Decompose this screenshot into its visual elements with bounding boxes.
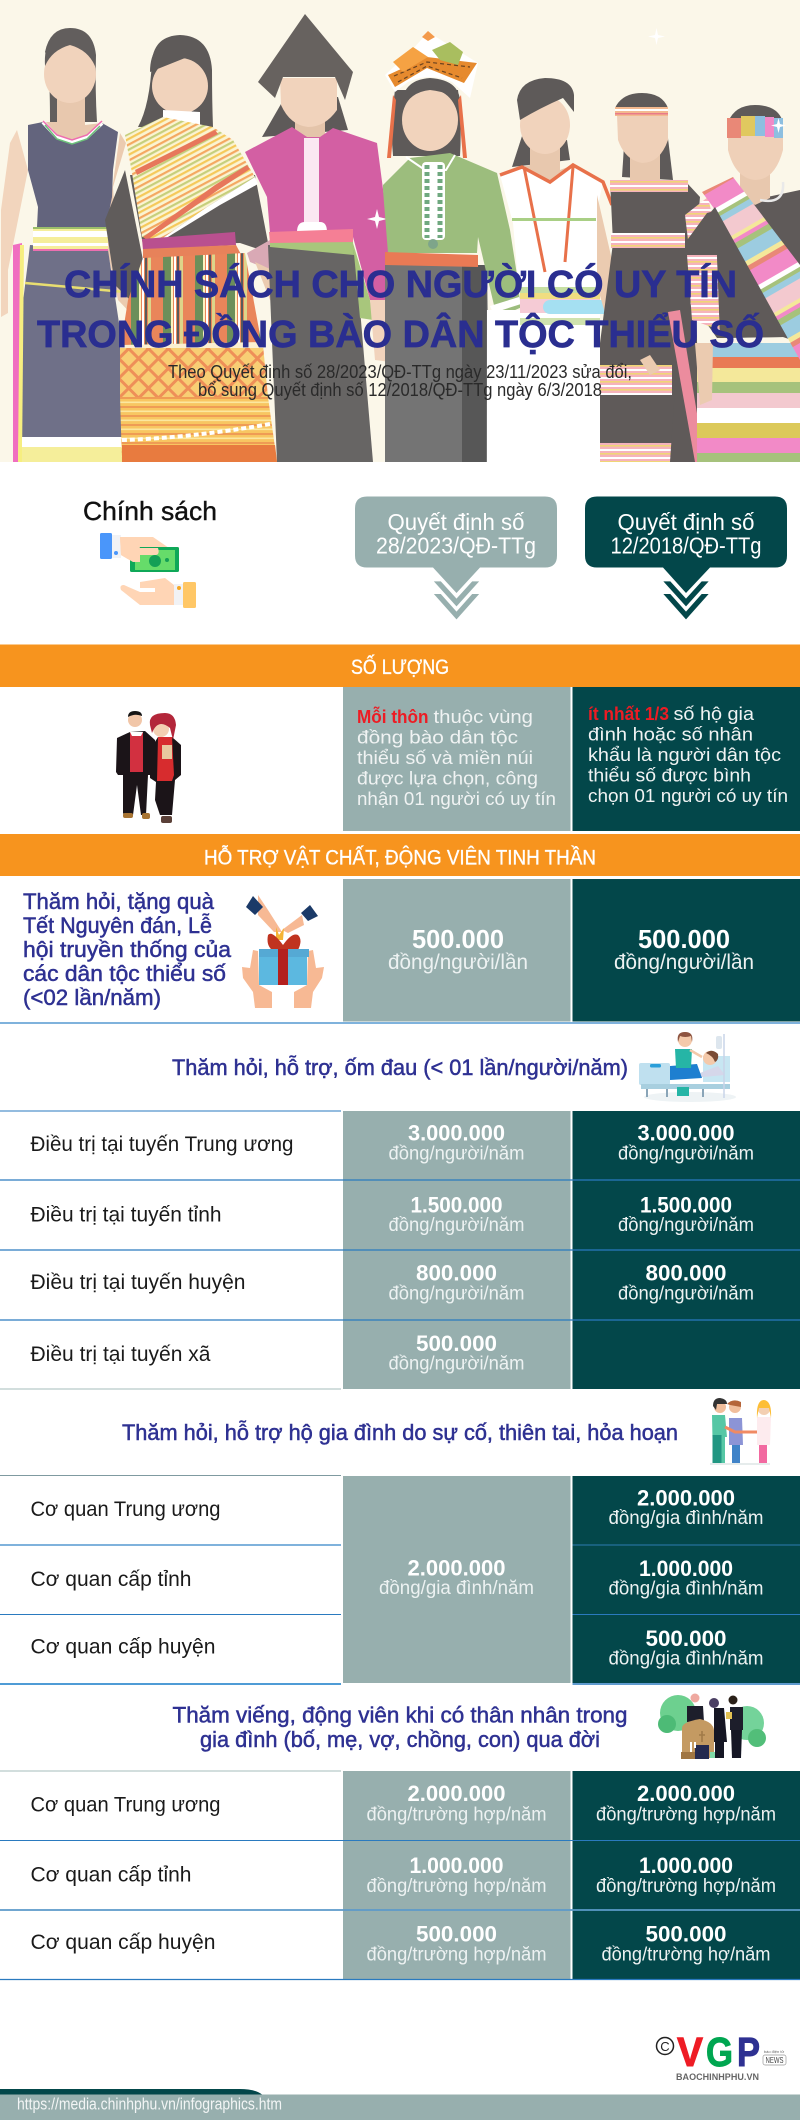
- values 12/2018: đồng/người/năm: [618, 1215, 754, 1236]
- logo: VGP news: báo điện tử: [764, 2049, 784, 2054]
- footer bar: https://media.chinhphu.vn/infographics.htm: [17, 2094, 282, 2114]
- section band: ho tro vat chat: HỖ TRỢ VẬT CHẤT, ĐỘNG VIÊN TINH THẦN: [204, 844, 596, 870]
- cell: so luong 12/2018: ít nhất 1/3: [588, 703, 669, 724]
- cell: tet visit 28/2023: 500.000: [412, 924, 504, 954]
- text: tet visit: Tết Nguyên đán, Lễ: [23, 913, 212, 938]
- merged value 28/2023: đồng/gia đình/năm: [379, 1578, 534, 1599]
- values 12/2018: đồng/trường hợp/năm: [596, 1876, 776, 1897]
- cell: tet visit 28/2023: đồng/người/lần: [388, 951, 528, 974]
- text: tet visit: [23, 889, 232, 1010]
- logo: VGP news: BAOCHINHPHU.VN: [676, 2072, 759, 2082]
- cell: so luong 28/2023: thiểu số và miền núi: [357, 747, 533, 768]
- title line 1: CHÍNH SÁCH CHO NGƯỜI CÓ UY TÍN: [64, 262, 737, 306]
- row label 2: Điều trị tại tuyến tỉnh: [30, 1204, 222, 1226]
- section band: so luong: SỐ LƯỢNG: [351, 653, 449, 679]
- values 28/2023: đồng/người/năm: [388, 1354, 524, 1374]
- row label 3: Điều trị tại tuyến huyện: [30, 1271, 246, 1294]
- table: bereavement rates: [0, 1771, 800, 1980]
- text: tet visit: các dân tộc thiểu số: [23, 961, 226, 986]
- values 28/2023: đồng/trường hợp/năm: [366, 1944, 546, 1966]
- cell: tet visit 12/2018: 500.000: [638, 924, 730, 954]
- values 12/2018: 2.000.000: [637, 1486, 735, 1510]
- logo: VGP news: [656, 2029, 786, 2082]
- callout: decision 28/2023: Quyết định số: [388, 509, 525, 535]
- figure 5: white dress with orange trim: [487, 78, 645, 462]
- values 28/2023: đồng/trường hợp/năm: [366, 1804, 546, 1826]
- values 12/2018: [596, 1781, 776, 1966]
- hero banner: seven women in ethnic costumes: [0, 0, 800, 462]
- logo: VGP news: C: [660, 2039, 670, 2054]
- cell: so luong 12/2018: khẩu là người dân tộc: [588, 744, 781, 765]
- cell: so luong 28/2023: nhận 01 người có uy tín: [357, 788, 556, 809]
- row label: province: Cơ quan cấp tỉnh: [30, 1864, 192, 1886]
- values 12/2018: 3.000.000: [638, 1121, 734, 1146]
- heading: bereavement support: [172, 1702, 628, 1752]
- icon: gift in hands: [242, 895, 324, 1008]
- logo: VGP news: NEWS: [766, 2056, 784, 2065]
- cell: tet visit 12/2018: [572, 879, 800, 1022]
- cell: so luong 12/2018: số hộ gia: [674, 703, 755, 724]
- values 28/2023: 500.000: [416, 1922, 497, 1946]
- icon: family at a grave: [658, 1694, 766, 1759]
- callout: decision 12/2018: 12/2018/QĐ-TTg: [610, 532, 762, 558]
- cell: so luong 28/2023: đồng bào dân tộc: [357, 726, 518, 748]
- values 12/2018: 800.000: [646, 1261, 726, 1286]
- figure 6: dark dress with headband: [600, 93, 712, 462]
- title line 2: TRONG ĐỒNG BÀO DÂN TỘC THIỂU SỐ: [37, 311, 764, 356]
- row label 4: Điều trị tại tuyến xã: [30, 1343, 211, 1366]
- values 28/2023: [388, 1121, 524, 1374]
- callout: decision 12/2018: [585, 496, 787, 620]
- values 28/2023: đồng/người/năm: [388, 1215, 524, 1236]
- values 12/2018: đồng/gia đình/năm: [608, 1648, 764, 1670]
- row label 1: Điều trị tại tuyến Trung ương: [30, 1133, 294, 1156]
- values 12/2018: đồng/người/năm: [618, 1284, 754, 1305]
- figure 2: striped shawl: [105, 35, 285, 462]
- row label: district: Cơ quan cấp huyện: [30, 1636, 216, 1658]
- icon: nurse and patient: [639, 1032, 736, 1102]
- values 12/2018: [608, 1486, 764, 1670]
- values 12/2018: đồng/gia đình/năm: [608, 1578, 764, 1600]
- figure 3: pink blouse and conical hat: [245, 14, 392, 462]
- icon: hands passing money: [100, 533, 196, 608]
- cell: so luong 28/2023: thuộc vùng: [434, 706, 533, 727]
- section band: so luong: [0, 644, 800, 687]
- values 28/2023: 1.500.000: [410, 1193, 502, 1218]
- row label: province: Cơ quan cấp tỉnh: [30, 1568, 192, 1591]
- values 12/2018: 1.000.000: [639, 1556, 733, 1581]
- table: sickness rates: [0, 1111, 800, 1389]
- cell: so luong 28/2023: Mỗi thôn: [357, 706, 428, 727]
- icon: three friends helping: [710, 1398, 771, 1465]
- heading: bereavement support: Thăm viếng, động viên khi có thân nhân trong: [172, 1702, 628, 1728]
- subtitle: Theo Quyết định số 28/2023/QĐ-TTg ngày 23/11/2023 sửa đổi,: [168, 362, 632, 382]
- cell: so luong 12/2018: chọn 01 người có uy tín: [588, 785, 788, 806]
- values 28/2023: [366, 1781, 546, 1966]
- values 28/2023: đồng/người/năm: [388, 1284, 524, 1305]
- values 12/2018: 500.000: [646, 1922, 726, 1946]
- cell: so luong 12/2018: thiểu số được bình: [588, 764, 751, 786]
- heading: bereavement support: gia đình (bố, mẹ, vợ, chồng, con) qua đời: [200, 1727, 600, 1752]
- callout: decision 28/2023: [355, 496, 557, 620]
- text: tet visit: hội truyền thống của: [23, 937, 232, 962]
- values 12/2018: 1.000.000: [639, 1853, 733, 1878]
- callout: decision 28/2023: 28/2023/QĐ-TTg: [376, 532, 536, 558]
- title: [37, 262, 764, 356]
- values 28/2023: 1.000.000: [410, 1853, 504, 1878]
- cell: tet visit 12/2018: đồng/người/lần: [614, 951, 754, 974]
- icon: ethnic couple: [116, 711, 181, 823]
- text: tet visit: (<02 lần/năm): [23, 985, 161, 1010]
- values 12/2018: 500.000: [646, 1626, 726, 1651]
- values 28/2023: 2.000.000: [408, 1781, 506, 1806]
- values 28/2023: 3.000.000: [408, 1121, 505, 1146]
- values 12/2018: 2.000.000: [637, 1781, 735, 1806]
- heading: disaster support: Thăm hỏi, hỗ trợ hộ gia đình do sự cố, thiên tai, hỏa hoạn: [122, 1420, 678, 1445]
- cell: so luong 12/2018: đình hoặc số nhân: [588, 724, 753, 744]
- values 12/2018: [618, 1121, 754, 1305]
- callout: decision 12/2018: Quyết định số: [618, 509, 755, 535]
- values 28/2023: đồng/người/năm: [388, 1144, 524, 1165]
- values 12/2018: đồng/trường hợp/năm: [596, 1804, 776, 1826]
- subtitle: [168, 362, 632, 400]
- logo: VGP news: V: [677, 2029, 704, 2075]
- figure 4: green blouse and headdress: [383, 31, 522, 462]
- merged value 28/2023: [379, 1556, 534, 1599]
- footer bar: [0, 2089, 800, 2120]
- values 28/2023: 500.000: [416, 1331, 497, 1356]
- row label: central: Cơ quan Trung ương: [30, 1498, 220, 1521]
- cell: so luong 28/2023: được lựa chọn, công: [357, 768, 538, 788]
- values 28/2023: 800.000: [416, 1261, 497, 1286]
- logo: VGP news: P: [737, 2029, 760, 2075]
- values 12/2018: đồng/gia đình/năm: [608, 1508, 764, 1529]
- values 12/2018: đồng/trường hợ/năm: [602, 1944, 770, 1966]
- row label: district: Cơ quan cấp huyện: [30, 1931, 216, 1954]
- subtitle: bổ sung Quyết định số 12/2018/QĐ-TTg ngày 6/3/2018: [198, 380, 602, 400]
- row label: central: Cơ quan Trung ương: [30, 1794, 220, 1816]
- cell: so luong 28/2023: [343, 687, 570, 831]
- cell: tet visit 28/2023: [343, 879, 570, 1022]
- figure 1: grey dress: [1, 28, 160, 462]
- values 28/2023: đồng/trường hợp/năm: [366, 1876, 546, 1897]
- merged value 28/2023: 2.000.000: [408, 1556, 506, 1580]
- heading: sickness support: Thăm hỏi, hỗ trợ, ốm đau (< 01 lần/người/năm): [172, 1055, 628, 1080]
- section band: ho tro vat chat: [0, 834, 800, 876]
- figure 7: striped scarf: [648, 28, 800, 462]
- values 12/2018: 1.500.000: [640, 1193, 732, 1218]
- cell: so luong 12/2018: [572, 687, 800, 831]
- table: disaster rates: [0, 1476, 800, 1684]
- text: tet visit: Thăm hỏi, tặng quà: [23, 889, 215, 914]
- values 12/2018: đồng/người/năm: [618, 1144, 754, 1165]
- policy column heading: Chính sách: [83, 496, 217, 526]
- logo: VGP news: G: [706, 2029, 733, 2075]
